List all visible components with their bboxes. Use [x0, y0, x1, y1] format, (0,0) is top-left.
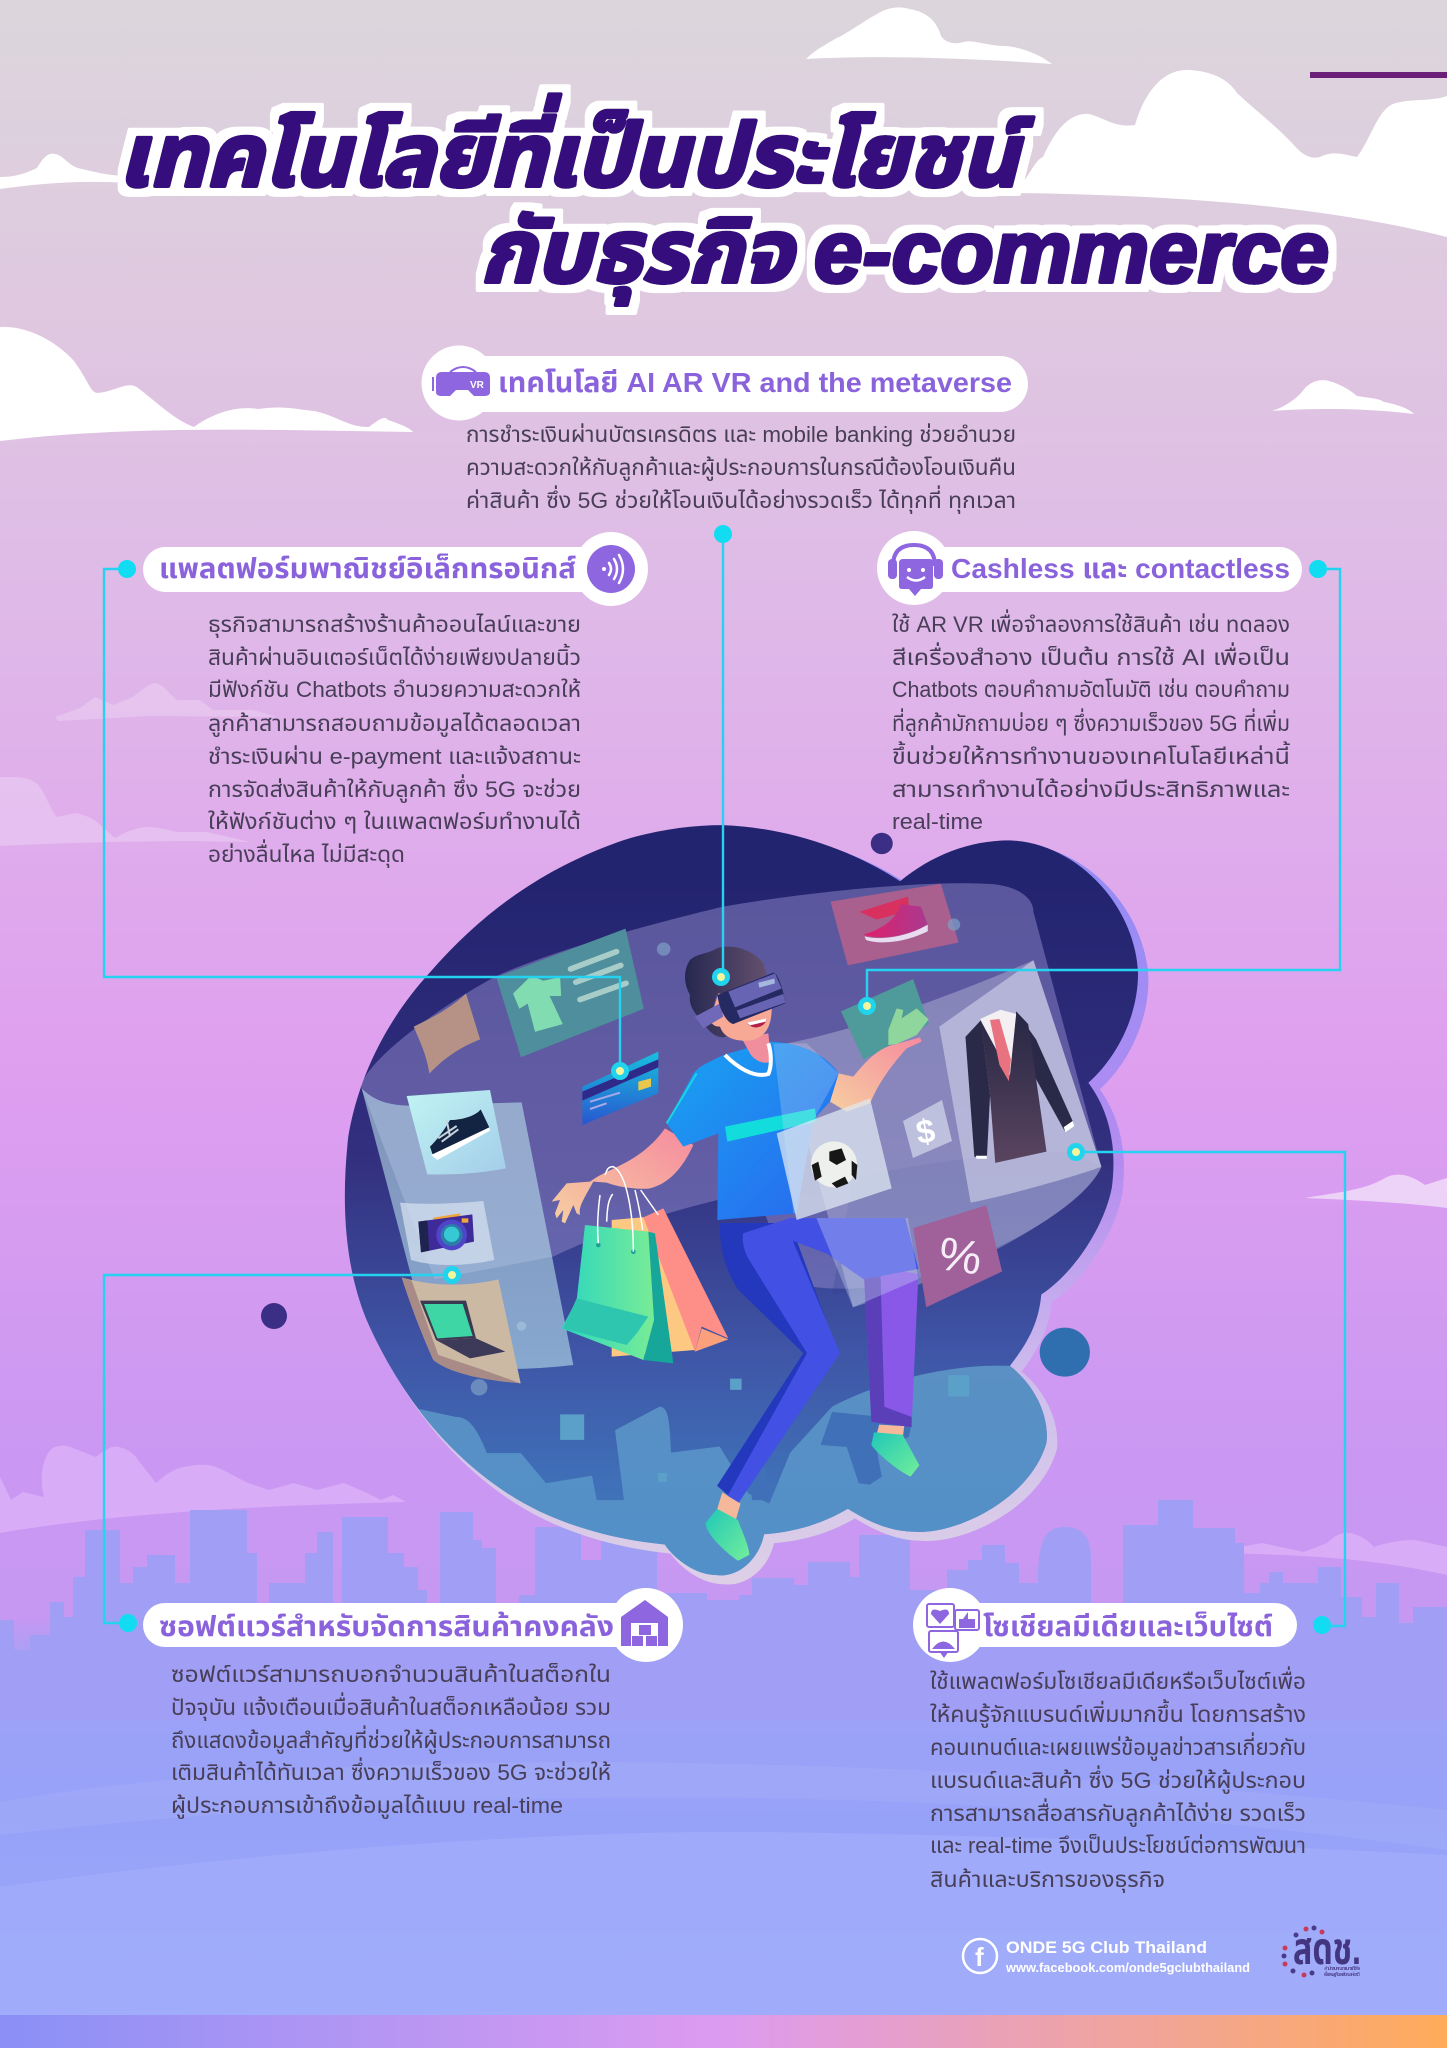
text block: เติมสินค้าได้ทันเวลา ซึ่งความเร็วของ 5G จะช่วยให้	[171, 1757, 611, 1785]
card: dollar	[903, 1100, 952, 1158]
VR headset	[717, 973, 785, 1024]
panel: cashless and contactless: Cashless และ contactless	[951, 553, 1290, 584]
card: green sheet	[841, 979, 929, 1060]
right glass panel	[781, 960, 1101, 1307]
text block	[466, 422, 1016, 514]
background: translucent mid clouds	[0, 683, 1447, 1208]
suit jacket	[965, 1010, 1074, 1163]
text block: การจัดส่งสินค้าให้กับลูกค้า ซึ่ง 5G จะช่วย	[208, 774, 581, 804]
text block: สามารถทำงานได้อย่างมีประสิทธิภาพและ	[892, 777, 1290, 802]
card: football	[777, 1098, 892, 1220]
floating squares	[560, 1375, 969, 1482]
footer: logo: สดช.	[1293, 1925, 1361, 1974]
bag handles	[598, 1167, 658, 1252]
icon: facebook: f	[975, 1942, 984, 1972]
person: shoes	[706, 1432, 919, 1561]
heading pill	[890, 547, 1302, 592]
person: right leg	[863, 1264, 918, 1427]
left panel items in detail coordinates	[362, 1052, 728, 1383]
card: sneaker	[407, 1090, 506, 1174]
text block: สีเครื่องสำอาง เป็นต้น การใช้ AI เพื่อเป็น	[892, 642, 1290, 670]
text block: ให้ฟังก์ชันต่าง ๆ ในแพลตฟอร์มทำงานได้	[208, 809, 581, 834]
icon: contactless	[587, 545, 635, 593]
text block: ใช้ AR VR เพื่อจำลองการใช้สินค้า เช่น ทดลอง	[892, 609, 1290, 637]
panel: social media and websites: โซเชียลมีเดียและเว็บไซต์	[983, 1611, 1273, 1642]
person: mouth	[747, 1018, 767, 1027]
text block: แบรนด์และสินค้า ซึ่ง 5G ช่วยให้ผู้ประกอบ	[930, 1765, 1306, 1795]
background: city skyline	[0, 1500, 1447, 1720]
footer: facebook credit: www.facebook.com/onde5gclubthailand	[1005, 1960, 1250, 1975]
panel: AI AR VR and the metaverse: เทคโนโลยี AI AR VR and the metaverse	[498, 367, 1012, 398]
card: camera	[400, 1201, 494, 1265]
background: lower waves	[0, 1762, 1447, 2015]
text block: ขึ้นช่วยให้การทำงานของเทคโนโลยีเหล่านี้	[892, 741, 1290, 769]
blob body	[345, 825, 1138, 1575]
card: credit card	[582, 1052, 658, 1125]
top right large cloud	[1015, 70, 1447, 237]
text block: คอนเทนต์และเผยแพร่ข้อมูลข่าวสารเกี่ยวกับ	[930, 1732, 1306, 1762]
title: กับธุรกิจ	[480, 202, 797, 305]
card: tan blank	[414, 993, 480, 1074]
upper figure in detail coordinates	[667, 947, 952, 1220]
icon: social bubbles	[927, 1604, 979, 1658]
icon: warehouse	[621, 1600, 668, 1646]
background: bottom clouds	[0, 1445, 1447, 1575]
bottom gradient bar	[0, 2015, 1447, 2048]
glass cylinder surface	[361, 883, 1101, 1289]
footer: logo: เพื่อเศรษฐกิจและสังคมแห่งชาติ	[1324, 1970, 1360, 1978]
person: hair	[685, 947, 767, 1037]
person: ankles	[717, 1425, 904, 1522]
decorative top right bar	[1310, 72, 1447, 78]
suit panel	[939, 960, 1101, 1203]
text block: ค่าสินค้า ซึ่ง 5G ช่วยให้โอนเงินได้อย่างรวดเร็ว ได้ทุกที่ ทุกเวลา	[466, 485, 1016, 514]
text block: การชำระเงินผ่านบัตรเครดิตร และ mobile banking ช่วยอำนวย	[466, 422, 1016, 447]
card: t-shirt	[496, 929, 644, 1057]
right small cloud	[1272, 380, 1414, 414]
card: dollar: $	[913, 1112, 939, 1152]
foreground cards in blob coordinates	[871, 833, 1090, 1377]
heading pill	[143, 547, 623, 592]
text block: ถึงแสดงข้อมูลสำคัญที่ช่วยให้ผู้ประกอบการสามารถ	[171, 1725, 611, 1755]
person: green hand	[888, 1008, 929, 1045]
band lower shade	[832, 1152, 1101, 1294]
panel: inventory software: ซอฟต์แวร์สำหรับจัดการสินค้าคงคลัง	[159, 1611, 614, 1642]
person: face	[710, 993, 772, 1041]
footer: facebook credit	[963, 1938, 1250, 1975]
person: collar	[725, 1043, 771, 1075]
circles	[871, 833, 1090, 1377]
top cloud	[806, 7, 1052, 64]
heading pill	[940, 1603, 1297, 1647]
text block: และ real-time จึงเป็นประโยชน์ต่อการพัฒนา	[930, 1833, 1306, 1858]
top left small cloud	[0, 154, 130, 189]
title: เทคโนโลยีที่เป็นประโยชน์	[118, 94, 1034, 205]
panel: e-commerce platform	[143, 532, 648, 868]
panel: inventory software	[143, 1588, 683, 1820]
connector dots	[446, 970, 1082, 1282]
text block: ซอฟต์แวร์สามารถบอกจำนวนสินค้าในสต็อกใน	[171, 1661, 611, 1687]
glass over pants	[816, 1218, 918, 1307]
text block: real-time	[892, 809, 983, 834]
text block	[930, 1666, 1306, 1893]
card: red sneakers	[831, 884, 959, 965]
text block	[208, 612, 581, 868]
text block: ธุรกิจสามารถสร้างร้านค้าออนไลน์และขาย	[208, 612, 581, 638]
panel: e-commerce platform: แพลตฟอร์มพาณิชย์อิเล็กทรอนิกส์	[159, 553, 576, 584]
text block: ใช้แพลตฟอร์มโซเชียลมีเดียหรือเว็บไซต์เพื่อ	[930, 1666, 1306, 1694]
text block: ผู้ประกอบการเข้าถึงข้อมูลได้แบบ real-time	[171, 1793, 563, 1820]
text block: ความสะดวกให้กับลูกค้าและผู้ประกอบการในกรณีต้องโอนเงินคืน	[466, 455, 1016, 482]
panel: AI AR VR and the metaverse	[422, 346, 1028, 514]
icon: facebook	[963, 1939, 997, 1973]
icon: VR headset: VR	[470, 380, 485, 391]
mid left cloud	[0, 327, 413, 441]
text block: ชำระเงินผ่าน e-payment และแจ้งสถานะ	[208, 744, 581, 769]
illustration: person shopping in VR	[345, 825, 1145, 1596]
glass over shirt	[773, 1043, 839, 1213]
heading pill	[143, 1603, 663, 1647]
person: right arm	[830, 1037, 922, 1112]
text block: ให้คนรู้จักแบรนด์เพิ่มมากขึ้น โดยการสร้าง	[930, 1699, 1306, 1729]
text block	[171, 1661, 611, 1820]
text block: Chatbots ตอบคำถามอัตโนมัติ เช่น ตอบคำถาม	[892, 677, 1290, 702]
shopping bags	[562, 1208, 728, 1363]
footer: facebook credit: ONDE 5G Club Thailand	[1006, 1938, 1207, 1957]
person: left arm	[552, 1128, 693, 1223]
card: percent: %	[935, 1228, 985, 1285]
faint dots	[471, 918, 960, 1396]
title	[118, 94, 1329, 305]
scene in blob coordinates	[345, 825, 1145, 1596]
text block: การสามารถสื่อสารกับลูกค้าได้ง่าย รวดเร็ว	[930, 1798, 1306, 1828]
text block: สินค้าและบริการของธุรกิจ	[930, 1867, 1165, 1893]
VR strap	[695, 1003, 723, 1028]
blob halo	[352, 831, 1145, 1581]
footer: logo	[1282, 1925, 1361, 1978]
icon: VR headset	[433, 367, 490, 396]
text block	[892, 609, 1290, 834]
blob city silhouette	[418, 1366, 1047, 1576]
text block: สินค้าผ่านอินเตอร์เน็ตได้ง่ายเพียงปลายนิ้ว	[208, 643, 581, 670]
text block: ที่ลูกค้ามักถามบ่อย ๆ ซึ่งความเร็วของ 5G ที่เพิ่ม	[892, 708, 1290, 738]
connector lines	[104, 534, 1345, 1626]
title: e-commerce	[814, 202, 1329, 301]
person: shirt	[667, 1042, 839, 1220]
panel: social media and websites	[913, 1588, 1306, 1893]
dark circle left	[261, 1303, 287, 1329]
card: laptop	[402, 1277, 521, 1383]
left glass panel	[362, 1088, 573, 1369]
text block: มีฟังก์ชัน Chatbots อำนวยความสะดวกให้	[208, 677, 581, 702]
panel: cashless and contactless	[877, 531, 1302, 834]
icon: support headset	[888, 545, 943, 596]
heading pill	[424, 356, 1028, 412]
person: neck	[742, 1033, 771, 1063]
text block: ปัจจุบัน แจ้งเตือนเมื่อสินค้าในสต็อกเหลือน้อย รวม	[171, 1692, 611, 1721]
text block: ลูกค้าสามารถสอบถามข้อมูลได้ตลอดเวลา	[208, 711, 581, 738]
text block: อย่างลื่นไหล ไม่มีสะดุด	[208, 839, 405, 868]
footer: logo: สำนักงานคณะกรรมการดิจิทัล	[1324, 1965, 1360, 1972]
card: percent	[913, 1205, 1002, 1307]
person: left leg	[717, 1218, 918, 1504]
